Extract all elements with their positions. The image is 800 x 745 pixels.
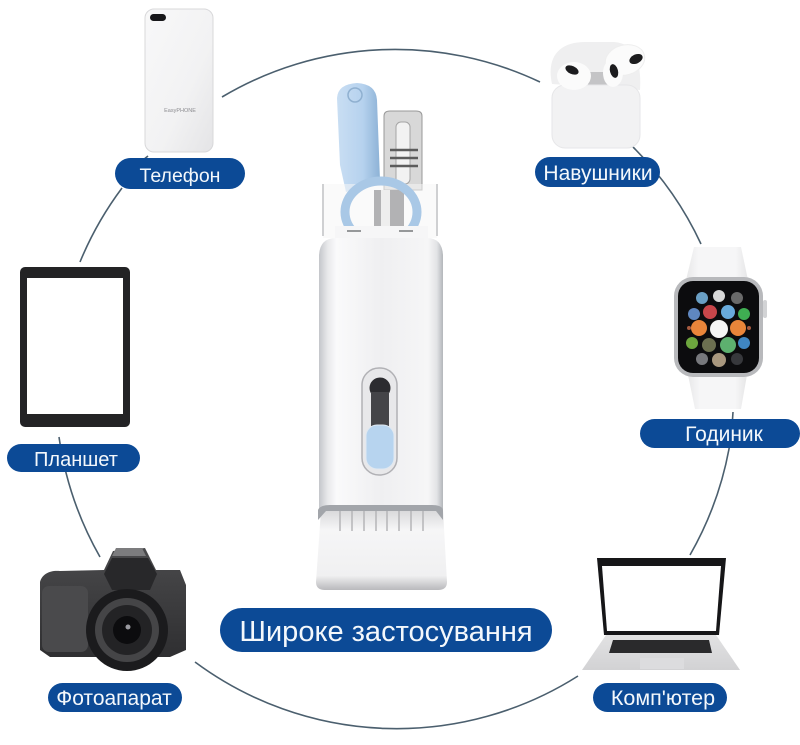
holder slots (347, 230, 413, 232)
label: phone (115, 158, 245, 189)
label: tablet (7, 444, 140, 472)
label: earbuds: Навушники (543, 162, 653, 185)
slider slot (362, 368, 397, 475)
brush bristles (316, 508, 447, 590)
icon: phone (145, 9, 213, 152)
label: camera (48, 683, 182, 712)
label: tablet: Планшет (34, 449, 118, 471)
blue ring (345, 181, 417, 243)
title pill: Широке застосування (239, 616, 533, 648)
body lip (318, 505, 443, 520)
label: laptop: Комп'ютер (611, 686, 715, 710)
watch app icons (686, 290, 751, 367)
icon: watch (674, 247, 767, 409)
product: cleaning tool (316, 83, 447, 590)
icon: phone: EasyPHONE (164, 108, 196, 114)
connecting circle (59, 49, 733, 729)
icon: camera (40, 548, 186, 671)
label: camera: Фотоапарат (56, 687, 172, 710)
main body (319, 238, 443, 515)
holder base (335, 226, 428, 238)
icon: tablet (20, 267, 130, 427)
label: laptop (593, 683, 727, 712)
icon: earbuds (551, 40, 648, 148)
title pill (220, 608, 552, 652)
label: watch (640, 419, 800, 448)
label: phone: Телефон (140, 165, 220, 187)
label: watch: Годиник (685, 423, 764, 446)
icon: laptop (582, 558, 740, 670)
blue pen (337, 83, 380, 192)
clear brush tube (384, 111, 422, 190)
label: earbuds (535, 157, 660, 187)
back holder (323, 184, 437, 238)
